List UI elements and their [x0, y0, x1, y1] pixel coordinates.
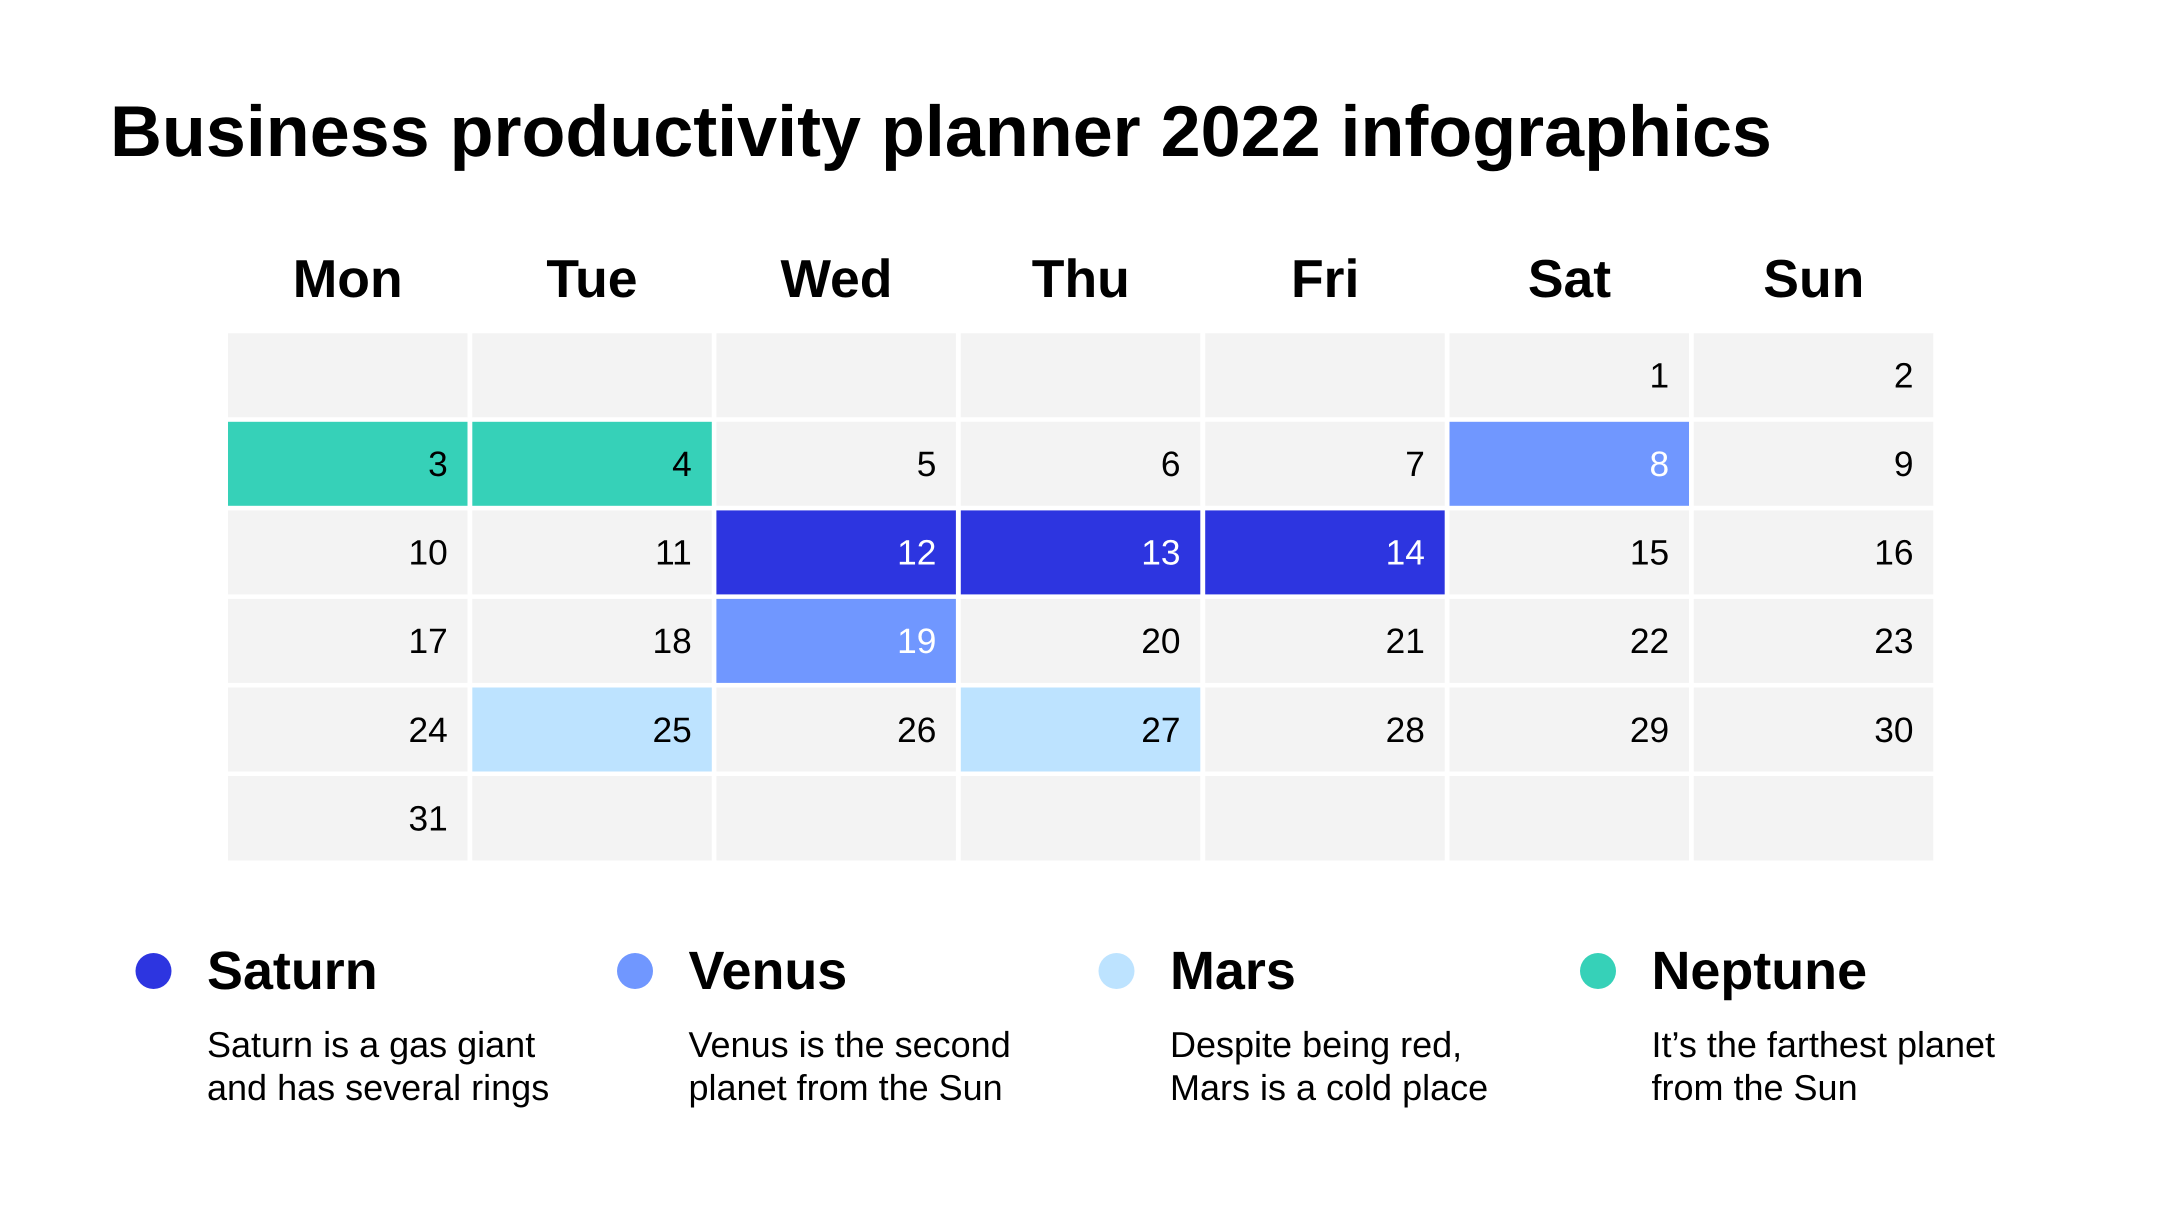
legend: Saturn	[136, 941, 549, 1108]
week 2: 8	[1650, 445, 1669, 484]
week 5: 30	[1874, 711, 1914, 750]
legend: Mars	[1098, 941, 1488, 1108]
week 4: 19	[897, 622, 936, 661]
week 3: 11	[655, 534, 692, 573]
Mars description: Mars is a cold place	[1170, 1067, 1488, 1108]
Saturn description: Saturn is a gas giant	[207, 1024, 535, 1065]
Venus heading: Venus	[688, 941, 847, 1001]
week 5: 26	[897, 711, 936, 750]
weekday headers: Mon	[293, 250, 403, 309]
weekday headers: Tue	[546, 250, 638, 309]
weekday headers: Wed	[781, 250, 892, 309]
week 1	[228, 333, 1933, 417]
week 3: 13	[1141, 534, 1180, 573]
week 5: 27	[1141, 711, 1180, 750]
legend: Neptune	[1580, 941, 1995, 1108]
legend: Venus	[617, 941, 1011, 1108]
icon: Neptune dot	[1580, 953, 1616, 989]
week 3	[228, 510, 1933, 594]
week 4: 22	[1630, 622, 1669, 661]
Saturn heading: Saturn	[207, 941, 378, 1001]
Mars heading: Mars	[1170, 941, 1296, 1001]
Saturn description: and has several rings	[207, 1067, 549, 1108]
week 4: 21	[1386, 622, 1425, 661]
week 5	[228, 688, 1933, 772]
Venus description: Venus is the second	[688, 1024, 1011, 1065]
week 3: 14	[1386, 534, 1425, 573]
week 2: 4	[672, 445, 692, 484]
title: Business productivity planner 2022 infographics	[110, 92, 1772, 172]
week 6	[228, 776, 1933, 860]
week 2: 3	[428, 445, 448, 484]
week 4: 23	[1874, 622, 1914, 661]
week 5: 29	[1630, 711, 1669, 750]
week 5: 24	[409, 711, 448, 750]
weekday headers: Sat	[1528, 250, 1611, 309]
week 4: 17	[409, 622, 448, 661]
weekday headers	[293, 250, 1864, 309]
weekday headers: Thu	[1032, 250, 1130, 309]
week 5: 25	[653, 711, 692, 750]
week 6: 31	[409, 799, 448, 838]
calendar grid	[228, 333, 1933, 860]
Neptune heading: Neptune	[1652, 941, 1867, 1001]
week 2	[228, 422, 1933, 506]
week 2: 9	[1894, 445, 1914, 484]
week 2: 7	[1405, 445, 1425, 484]
Mars description: Despite being red,	[1170, 1024, 1462, 1065]
week 4	[228, 599, 1933, 683]
weekday headers: Fri	[1291, 250, 1359, 309]
week 4: 18	[653, 622, 692, 661]
week 2: 6	[1161, 445, 1180, 484]
week 3: 16	[1874, 534, 1914, 573]
week 2: 5	[917, 445, 936, 484]
week 3: 15	[1630, 534, 1669, 573]
week 5: 28	[1386, 711, 1425, 750]
week 1: 1	[1650, 357, 1669, 396]
Venus description: planet from the Sun	[688, 1067, 1003, 1108]
week 3: 12	[897, 534, 936, 573]
Neptune description: It’s the farthest planet	[1652, 1024, 1995, 1065]
week 3: 10	[409, 534, 448, 573]
week 1: 2	[1894, 357, 1914, 396]
icon: Saturn dot	[136, 953, 172, 989]
week 4: 20	[1141, 622, 1180, 661]
icon: Venus dot	[617, 953, 653, 989]
weekday headers: Sun	[1763, 250, 1864, 309]
icon: Mars dot	[1098, 953, 1134, 989]
Neptune description: from the Sun	[1652, 1067, 1858, 1108]
